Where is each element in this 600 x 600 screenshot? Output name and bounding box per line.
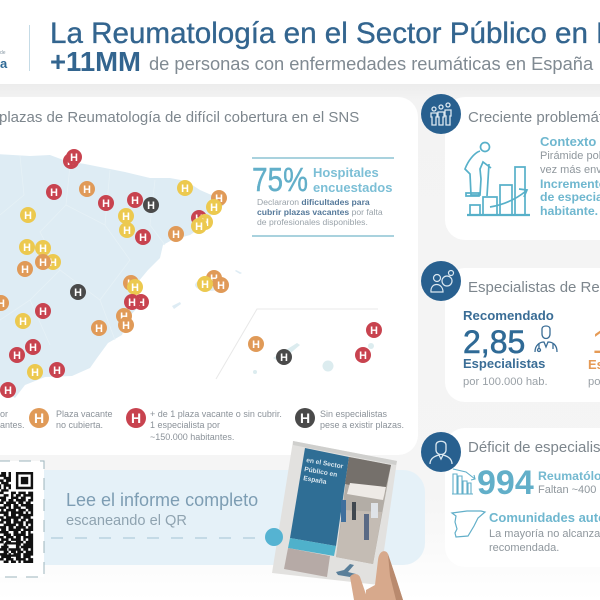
hospital pins bbox=[0, 149, 382, 398]
panel: deficit bbox=[421, 428, 600, 567]
subtitle bbox=[50, 46, 594, 77]
icon: elderly person with rising bars bbox=[465, 142, 530, 215]
report book held by hand bbox=[265, 441, 403, 600]
book logo bbox=[336, 564, 356, 577]
legend: or bbox=[0, 409, 8, 419]
legend: H bbox=[131, 410, 141, 426]
icon: doctor bbox=[535, 326, 557, 352]
legend bbox=[0, 408, 404, 442]
callout: 75% hospitals: Hospitales bbox=[313, 165, 379, 180]
callout: 75% hospitals: cubrir plazas vacantes por falta bbox=[257, 207, 383, 217]
icon: group circle bbox=[421, 261, 461, 301]
legend: no cubierta. bbox=[56, 420, 103, 430]
autonomous communities text bbox=[489, 510, 600, 554]
legend: Sin especialistas bbox=[320, 409, 388, 419]
map of Spain bbox=[0, 154, 226, 398]
legend: Plaza vacante bbox=[56, 409, 113, 419]
hand bbox=[350, 551, 403, 600]
map heading: plazas de Reumatología de difícil cobertura en el SNS bbox=[0, 109, 359, 126]
book grey block bbox=[284, 548, 330, 577]
subtitle: +11MM bbox=[50, 46, 141, 77]
panel: map bbox=[0, 97, 418, 455]
header logo bbox=[0, 50, 8, 71]
callout: 75% hospitals: Declararon dificultades para bbox=[257, 197, 370, 207]
994 figure bbox=[477, 464, 600, 502]
legend: pese a existir plazas. bbox=[320, 420, 404, 430]
callout: 75% hospitals: 75% bbox=[252, 161, 308, 198]
autonomous communities text: recomendada. bbox=[489, 542, 559, 554]
current figure bbox=[588, 324, 600, 388]
icon: people circle bbox=[421, 94, 461, 134]
legend: antes. bbox=[0, 420, 25, 430]
banner: read the report: escaneando el QR bbox=[66, 513, 187, 529]
callout: 75% hospitals: de profesionales disponibles. bbox=[257, 217, 368, 227]
recommended figure: por 100.000 hab. bbox=[463, 376, 548, 388]
callout: 75% hospitals: encuestados bbox=[313, 180, 392, 195]
header logo: a bbox=[0, 56, 8, 71]
994 figure: 994 bbox=[477, 464, 534, 502]
header divider bbox=[29, 25, 30, 71]
recommended figure bbox=[463, 308, 554, 388]
book title: España bbox=[303, 475, 327, 486]
legend: 1 especialista por bbox=[150, 420, 220, 430]
legend: + de 1 plaza vacante o sin cubrir. bbox=[150, 409, 282, 419]
pointer dot bbox=[265, 528, 283, 546]
legend: H bbox=[300, 410, 310, 426]
book photo bbox=[336, 457, 391, 564]
context text: habitante. bbox=[540, 204, 598, 218]
recommended figure: 2,85 bbox=[463, 324, 525, 360]
book teal band bbox=[288, 538, 336, 556]
callout: 75% hospitals bbox=[252, 157, 394, 237]
icon: declining bars bbox=[452, 469, 475, 494]
header logo: de bbox=[0, 50, 6, 56]
book title: Público en bbox=[304, 466, 338, 479]
book title bbox=[303, 457, 344, 486]
subtitle: de personas con enfermedades reumáticas en España bbox=[149, 53, 594, 74]
context text bbox=[540, 134, 600, 218]
panel: specialists bbox=[421, 261, 600, 402]
book title: en el Sector bbox=[306, 457, 344, 471]
recommended figure: Recomendado bbox=[463, 308, 554, 323]
icon: Spain outline bbox=[452, 511, 485, 537]
Balearic islands bbox=[172, 270, 242, 309]
QR code bbox=[0, 461, 44, 577]
recommended figure: Especialistas bbox=[463, 356, 545, 371]
context text: Contexto bbox=[540, 134, 596, 149]
book cover blue bbox=[290, 448, 349, 546]
icon: doctor circle bbox=[421, 432, 461, 472]
legend: ~150.000 habitantes. bbox=[150, 432, 234, 442]
legend: H bbox=[34, 410, 44, 426]
banner: read the report: Lee el informe completo bbox=[66, 490, 258, 510]
banner: read the report bbox=[20, 470, 425, 565]
panel: growing problem bbox=[421, 94, 600, 240]
Canary islands inset bbox=[216, 309, 378, 379]
